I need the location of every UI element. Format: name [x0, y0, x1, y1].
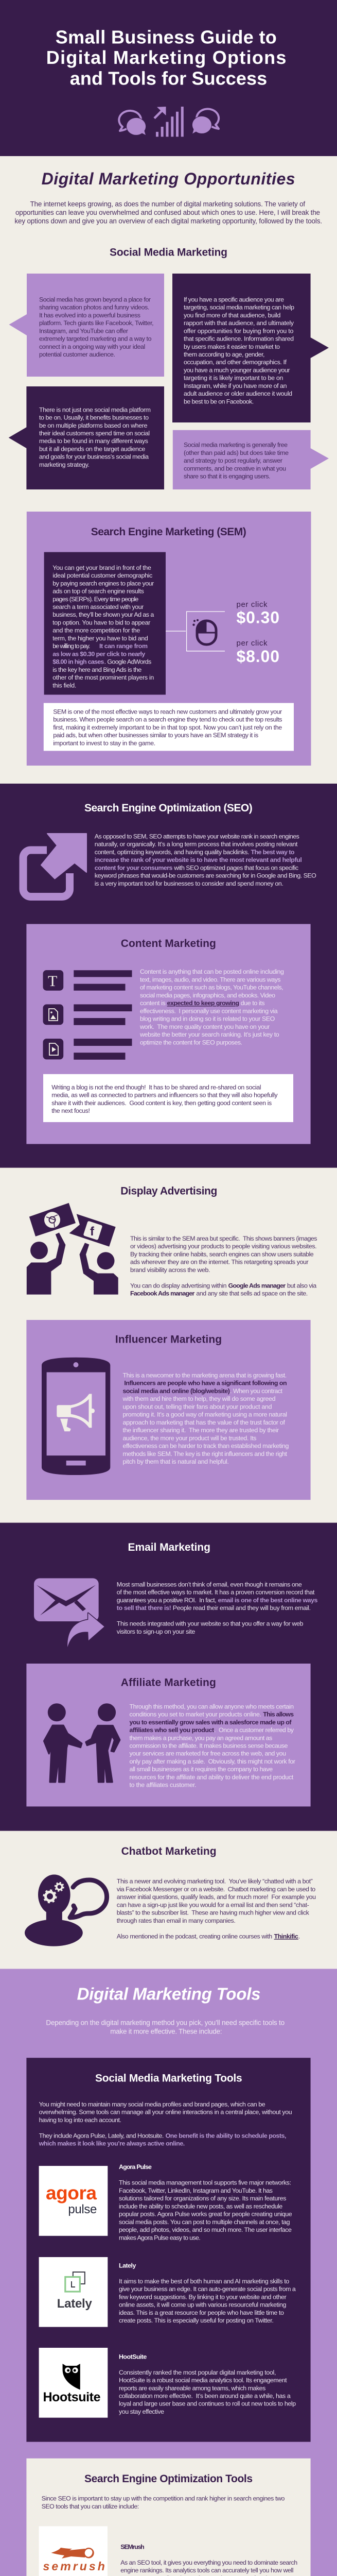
- text: influencer description: Influencers are people who have a significant following on: [124, 1380, 287, 1387]
- panel: specific audience callout: that specific audience. Information shared: [184, 335, 294, 342]
- text: affiliate description: . Once a customer referred by: [214, 1726, 294, 1734]
- tool: Agora Pulse: [119, 2163, 292, 2241]
- logo: Hootsuite: Hootsuite: [43, 2390, 101, 2404]
- logo: Lately: [39, 2257, 108, 2327]
- intro text: opportunities can leave you overwhelmed and confused about which ones to use. Here, I will break the: [15, 209, 320, 216]
- panel: specific audience callout: you have a much younger audience your: [184, 366, 290, 374]
- text: content description: website the better your search ranking. It’s just key to: [139, 1031, 279, 1038]
- text: affiliate description: [130, 1703, 295, 1789]
- text box: SEM description: by paying search engines to place your: [52, 580, 154, 587]
- panel: free but takes time callout: Social media marketing is generally free: [184, 442, 288, 449]
- text: content description: expected to keep growing: [167, 999, 239, 1007]
- text: SEO description: increase the rank of your website is to have the most relevant and helpful: [95, 856, 302, 863]
- section: Digital Marketing Tools: [0, 1969, 337, 2576]
- text: email description: [117, 1581, 317, 1635]
- stat: cost per click low: per click: [237, 600, 268, 609]
- panel: social media platform callout: potential customer audience.: [39, 351, 115, 358]
- panel: Influencer Marketing: [26, 1320, 311, 1500]
- tool: SEMrush: [120, 2543, 297, 2576]
- text: affiliate description: resources for the affiliate and ability to deliver the end product: [130, 1773, 294, 1781]
- text: SEO description: is a very important tool for businesses to consider and spend money on.: [95, 880, 283, 887]
- tool: HootSuite: Consistently ranked the most popular digital marketing tool,: [119, 2369, 276, 2376]
- panel: specific audience callout: Instagram, while if you have more of an: [184, 382, 287, 389]
- tool: SEMrush: As an SEO tool, it gives you everything you need to dominate search: [120, 2559, 297, 2566]
- panel: multiple platforms callout: and goals for your business’s social media: [39, 453, 149, 461]
- text: social tools intro: having to log into each account.: [39, 2116, 121, 2124]
- panel: social media platform callout: It has evolved into a powerful business: [39, 312, 140, 319]
- text: influencer description: pitch by them that is natural and helpful.: [122, 1458, 229, 1465]
- text box: SEM description: business, they’ll be shown your Ad as a: [52, 611, 154, 618]
- text: social tools intro: They include Agora Pulse, Lately, and Hootsuite.: [39, 2132, 164, 2139]
- text box: SEM description: this field.: [52, 682, 76, 689]
- panel: specific audience callout: offer opportunities for buying from you to: [184, 327, 293, 334]
- panel: multiple platforms callout: [9, 386, 164, 489]
- icon: phone with megaphone: [42, 1358, 110, 1475]
- panel: Content Marketing: [26, 924, 311, 1144]
- text: affiliate description: only pay after making a sale. Obviously, this might not work for: [130, 1758, 295, 1765]
- text box: SEM effectiveness: SEM is one of the most effective ways to reach new customers and ultimately grow your: [53, 708, 282, 715]
- tool: HootSuite: collaboration more effective. It’s been around quite a while, has a: [119, 2393, 291, 2400]
- icon: text content tile: T: [48, 973, 57, 990]
- panel: social media platform callout: Social media has grown beyond a place for: [39, 296, 151, 303]
- panel: specific audience callout: by users makes it easier to market to: [184, 343, 280, 350]
- icon: speech bubbles left: [119, 111, 146, 135]
- logo: SEMrush: semrush: [43, 2560, 105, 2573]
- icon: speech bubbles right: [192, 109, 219, 134]
- text: affiliate description: Through this method, you can allow anyone who meets certain: [130, 1703, 294, 1710]
- text: influencer description: approach to marketing that has the value of the trust factor of: [122, 1419, 285, 1426]
- icon: rising bar chart with arrow: [154, 107, 184, 137]
- text: chatbot description: Also mentioned in the podcast, creating online courses with: [117, 1933, 272, 1940]
- stat: cost per click high: per click: [237, 639, 268, 648]
- heading: Digital Marketing Tools: Digital Marketing Tools: [77, 1985, 260, 2003]
- text: influencer description: methods like SEM. The key is the right influencers and the right: [122, 1450, 288, 1458]
- panel: free but takes time callout: share so that it is engaging users.: [184, 473, 271, 480]
- panel: multiple platforms callout: but it all depends on the target audience: [39, 445, 145, 452]
- icon: text content tile: [43, 970, 132, 991]
- icon: two people shaking hands: [44, 1704, 120, 1782]
- panel: social media platform callout: Instagram, and YouTube can offer: [39, 327, 128, 334]
- logo: Lately: Lately: [57, 2297, 92, 2311]
- text: affiliate description: them makes a purchase, you pay an agreed amount as: [130, 1734, 272, 1741]
- text: content description: due to its: [241, 999, 265, 1007]
- text: social tools intro: which makes it look like you’re always active online.: [39, 2140, 185, 2147]
- stat: cost per click low: $0.30: [237, 608, 279, 626]
- text: influencer description: [122, 1371, 289, 1465]
- text box: SEM description: be willing to pay.: [52, 642, 90, 650]
- logo: SEMrush: [39, 2526, 108, 2576]
- section: Chatbot Marketing: [25, 1845, 316, 1946]
- text: email description: of the most effective ways to market. It has a proven conversion record that: [117, 1589, 315, 1596]
- text: content description: [139, 968, 284, 1046]
- heading: Search Engine Optimization Tools: Search Engine Optimization Tools: [84, 2473, 253, 2485]
- stat: cost per click high: $8.00: [237, 647, 279, 666]
- text: email description: People read their email and they will buy from email.: [173, 1604, 311, 1612]
- text: affiliate description: commission to the affiliate. It makes business sense because: [130, 1742, 288, 1750]
- text box: SEM effectiveness: important to invest to stay in the game.: [53, 739, 155, 747]
- logo: Agora Pulse: agora: [46, 2182, 97, 2204]
- tool: Lately: create posts. This is especially useful for posting on Twitter.: [119, 2317, 274, 2324]
- text: display description: brand visibility across the web.: [130, 1266, 210, 1274]
- text: display description: You can do display advertising within: [130, 1282, 227, 1289]
- panel: multiple platforms callout: media to be found in many different ways: [39, 437, 148, 445]
- heading: SEO: Search Engine Optimization (SEO): [84, 802, 253, 814]
- text: display description: Google Ads manager: [228, 1282, 286, 1289]
- heading: SEM: Search Engine Marketing (SEM): [91, 526, 246, 538]
- heading: Influencer Marketing: Influencer Marketing: [115, 1334, 222, 1346]
- text: chatbot description: via Facebook Messenger or on a website. Chatbot marketing can be used to: [117, 1886, 315, 1893]
- icon: image content tile: [43, 1004, 132, 1025]
- text: social tools intro: One benefit is the ability to schedule posts,: [166, 2132, 286, 2139]
- text: social tools intro: overwhelming. Some tools can manage all your online interactions in a central place, without you: [39, 2109, 292, 2116]
- tool: HootSuite: you stay effective: [119, 2408, 164, 2415]
- panel: Social Media Marketing Tools: [26, 2058, 311, 2442]
- heading: Chatbot Marketing: Chatbot Marketing: [121, 1845, 217, 1857]
- panel: free but takes time callout: [173, 430, 329, 489]
- icon: people holding ad banners: [27, 1203, 118, 1295]
- text box: SEM description: is the key here and Bing Ads is the: [52, 666, 141, 673]
- tool: HootSuite: [119, 2353, 296, 2415]
- intro text: key options down and give you an overview of each digital marketing opportunity, followed by the tools.: [14, 217, 322, 225]
- tool: Lately: few keyword suggestions. By linking it to your website and other: [119, 2293, 287, 2300]
- text: display description: This is similar to the SEM area but specific. This shows banners (images: [130, 1235, 317, 1242]
- text: email description: Most small businesses don’t think of email, even though it remains one: [117, 1581, 302, 1588]
- tool: Agora Pulse: Agora Pulse: [119, 2163, 152, 2171]
- text: content description: social media pages, infographics, and ebooks. Video: [140, 992, 275, 999]
- heading: Email Marketing: Email Marketing: [128, 1541, 210, 1553]
- heading: Social Media Marketing: Social Media Marketing: [110, 247, 227, 259]
- text box: SEM description: It can range from: [99, 642, 148, 650]
- tool: SEMrush: SEMrush: [120, 2543, 145, 2550]
- text: tools intro: Depending on the digital marketing method you pick, you’ll need specific tools to: [46, 2019, 285, 2027]
- logo: Agora Pulse: [39, 2166, 108, 2236]
- tool: Agora Pulse: include the ability to schedule new posts, as well as reschedule: [119, 2202, 282, 2210]
- tool: Agora Pulse: people, add photos, videos, and so much more. The user interface: [119, 2226, 292, 2233]
- tool: Agora Pulse: This social media management tool supports five major networks:: [119, 2179, 291, 2187]
- panel: specific audience callout: rapport with that audience, and ultimately: [184, 319, 294, 327]
- text: affiliate description: to the affiliates customer.: [130, 1782, 197, 1789]
- text: content description: work. The more quality content you have on your: [139, 1023, 270, 1030]
- text: SEO description: keyword phrases that would-be customers are searching for in Google and Bing. SEO: [95, 872, 316, 879]
- heading: Digital Marketing Opportunities: Digital Marketing Opportunities: [42, 170, 295, 188]
- tool: Lately: Lately: [119, 2262, 136, 2269]
- text: chatbot description: Thinkific: [274, 1933, 298, 1940]
- text: influencer description: promoting it. It’s a good way of marketing using a more natural: [122, 1411, 287, 1418]
- title: Digital Marketing Options: [46, 47, 286, 68]
- text: email description: visitors to sign-up on your site: [117, 1628, 195, 1635]
- panel: Search Engine Optimization Tools: [26, 2459, 311, 2576]
- text: content description: blog writing and in doing so it is related to your SEO: [140, 1015, 275, 1023]
- stat: cost per click high: [237, 639, 279, 666]
- heading: Content Marketing: Content Marketing: [121, 938, 216, 950]
- text: display description: and any site that sells ad space on the site.: [196, 1290, 308, 1297]
- panel: social media platform callout: [9, 274, 164, 377]
- heading: Display Advertising: Display Advertising: [120, 1185, 217, 1197]
- tool: HootSuite: reports are easily shareable among teams, which makes: [119, 2384, 265, 2392]
- text: tools intro: make it more effective. These include:: [110, 2027, 222, 2035]
- text: affiliate description: affiliates who sell you product: [130, 1726, 214, 1734]
- text: content description: of marketing content such as blogs, YouTube channels,: [140, 984, 283, 991]
- text: chatbot description: .: [298, 1933, 300, 1940]
- text box: SEM effectiveness: first, making it extremely important to be in that top spot. Now you can’t just rely on the: [53, 724, 282, 731]
- title: and Tools for Success: [70, 68, 267, 89]
- text: display description: but also via: [287, 1282, 316, 1289]
- text: email description: guarantees you a positive ROI. In fact,: [117, 1597, 217, 1604]
- tool: Agora Pulse: popular posts. Agora Pulse works great for people creating unique: [119, 2211, 292, 2218]
- panel: specific audience callout: targeting it is likely important to be on: [184, 375, 283, 382]
- text: SEO tools intro: SEO tools that you can utilize include:: [42, 2503, 139, 2510]
- text: tools intro: [46, 2019, 285, 2035]
- text: display description: Facebook Ads manager: [130, 1290, 194, 1297]
- text: email description: to sell that there is!: [117, 1604, 171, 1612]
- panel: free but takes time callout: (other than paid ads) but does take time: [184, 449, 289, 456]
- text box: SEM description: . Google AdWords: [104, 658, 151, 666]
- panel: multiple platforms callout: marketing strategy.: [39, 461, 90, 468]
- text box: sharing content: the next focus!: [51, 1107, 90, 1114]
- heading: Affiliate Marketing: Affiliate Marketing: [121, 1677, 216, 1689]
- tool: Agora Pulse: Facebook, Twitter, LinkedIn, Instagram and YouTube. It has: [119, 2187, 273, 2194]
- text: display description: ads wherever they are on the internet. This retargeting spreads your: [130, 1259, 309, 1266]
- text: SEO description: [95, 833, 316, 887]
- text box: SEM description: top option. You have to bid to appear: [52, 619, 150, 626]
- text: SEO tools intro: [42, 2495, 285, 2510]
- tool: Agora Pulse: solutions tailored for organizations of any size. Its main features: [119, 2195, 286, 2202]
- text: display description: or videos) advertising your products to people visiting various websites.: [130, 1243, 317, 1250]
- text: SEO tools intro: Since SEO is important to stay up with the competition and rank higher in search engines two: [42, 2495, 285, 2502]
- panel: social media platform callout: platform. Tech giants like Facebook, Twitter,: [39, 319, 154, 327]
- text: SEO description: As opposed to SEM, SEO attempts to have your website rank in search engines: [95, 833, 299, 840]
- text: SEO description: content, optimizing keywords, and having quality backlinks.: [95, 849, 250, 856]
- panel: free but takes time callout: comments, and be creative in what you: [184, 465, 286, 472]
- text box: SEM description: search a term associated with your: [52, 603, 144, 611]
- icon: computer mouse: [192, 619, 216, 645]
- text box: SEM description: as low as $0.30 per click to nearly: [52, 650, 145, 657]
- text: email description: This needs integrated with your website so that you offer a way for web: [117, 1620, 303, 1628]
- panel: multiple platforms callout: to be on. Usually, it benefits businesses to: [39, 414, 149, 421]
- panel: social media platform callout: connect in a ongoing way with your ideal: [39, 343, 145, 350]
- text box: sharing content: [43, 1074, 293, 1122]
- text: chatbot description: through rates than email in many companies.: [117, 1917, 236, 1924]
- text: content description: content is: [140, 999, 166, 1007]
- panel: social media platform callout: sharing vacation photos and funny videos.: [39, 304, 149, 311]
- text: display description: By tracking their online habits, search engines can show users suitable: [130, 1251, 314, 1258]
- text: chatbot description: This a newer and evolving marketing tool. You’ve likely “chatted with a bot”: [117, 1878, 313, 1885]
- text: email description: email is one of the best online ways: [218, 1597, 317, 1604]
- text box: SEM description: ads on top of search engine results: [52, 587, 144, 595]
- icon: external link arrow: [23, 834, 86, 897]
- text box: SEM description: other of the most prominent players in: [52, 674, 154, 681]
- connector line and bracket: [166, 612, 225, 651]
- section: Email Marketing: [0, 1523, 337, 1831]
- section: Display Advertising: [27, 1185, 317, 1297]
- panel: Affiliate Marketing: [26, 1664, 311, 1806]
- icon: video content tile: [43, 1039, 132, 1060]
- heading: Social Media Marketing Tools: Social Media Marketing Tools: [95, 2072, 242, 2084]
- panel: specific audience callout: adult audience or older audience it would: [184, 390, 292, 397]
- text box: SEM description: $8.00 in high cases: [52, 658, 104, 666]
- text: SEO description: with SEO optimized pages that focus on specific: [173, 864, 298, 871]
- text: influencer description: social media and online (blog/website): [122, 1387, 230, 1395]
- text box: SEM effectiveness: paid ads, but when other businesses similar to yours have an SEM strategy it is: [53, 732, 258, 739]
- panel: multiple platforms callout: be on multiple platforms based on where: [39, 422, 148, 429]
- logo: Agora Pulse: pulse: [68, 2202, 97, 2216]
- text: influencer description: . When you contract: [230, 1387, 283, 1395]
- text: display description: [130, 1235, 317, 1297]
- text: chatbot description: [117, 1878, 316, 1940]
- text box: SEM description: You can get your brand in front of the: [52, 564, 151, 571]
- intro text: [14, 200, 322, 225]
- panel: specific audience callout: occupation, and other demographics. If: [184, 359, 287, 366]
- text box: SEM effectiveness: [44, 703, 294, 751]
- title: [46, 26, 286, 89]
- text box: SEM effectiveness: business. When people search on a search engine they tend to check out the top results: [53, 716, 282, 723]
- tool: Agora Pulse: makes Agora Pulse easy to use.: [119, 2234, 201, 2241]
- tool: Lately: [119, 2262, 296, 2324]
- section: Search Engine Optimization: [0, 784, 337, 1168]
- text: social tools intro: You might need to maintain many social media profiles and brand pages, which can be: [39, 2101, 265, 2108]
- text: affiliate description: you to essentially grow sales with a salesforce made up of: [130, 1719, 292, 1726]
- panel: specific audience callout: If you have a specific audience you are: [184, 296, 284, 303]
- panel: specific audience callout: be best to be on Facebook.: [184, 398, 254, 405]
- icon: envelope with forward arrow: [34, 1578, 104, 1647]
- text: chatbot description: answer initial questions, qualify leads, and for much more! For example you: [117, 1893, 316, 1901]
- text: content description: effectiveness. I personally use content marketing via: [140, 1007, 278, 1014]
- logo: Hootsuite: [39, 2348, 108, 2418]
- text: content description: Content is anything that can be posted online including: [140, 968, 284, 975]
- text box: sharing content: media, as well as connected to partners and influencers so that they will also hopefully: [51, 1092, 278, 1099]
- text box: SEM description: ideal potential customer demographic: [52, 572, 152, 579]
- text: content description: text, images, audio, and video. There are various ways: [140, 976, 281, 983]
- text: influencer description: effectiveness can be harder to track than established marketing: [122, 1443, 289, 1450]
- text: influencer description: This is a newcomer to the marketing arena that is growing fast.: [122, 1371, 287, 1379]
- panel: specific audience callout: you find more of that audience, build: [184, 312, 280, 319]
- text: affiliate description: your services are marketed for free across the web, and you: [130, 1750, 286, 1757]
- panel: specific audience callout: them according to age, gender,: [184, 351, 264, 358]
- tool: HootSuite: HootSuite is a robust social media analytics tool. Its engagement: [119, 2377, 287, 2384]
- icon: people holding ad banners: f: [90, 1225, 95, 1239]
- tool: Lately: ideas. This is a great resource for people who have little time to: [119, 2309, 284, 2316]
- tool: SEMrush: engine rankings. Its analytics tools can accurately tell you how well: [120, 2567, 294, 2574]
- text: SEO description: content for your consumers: [95, 864, 172, 871]
- text: content description: optimize the content for SEO purposes.: [140, 1039, 242, 1046]
- text box: sharing content: share it with their audiences. Good content is key, then getting good content seen is: [51, 1099, 272, 1107]
- tool: Lately: It aims to make the best of both human and AI marketing skills to: [119, 2278, 289, 2285]
- text: SEO description: The best way to: [251, 849, 295, 856]
- text: social tools intro: [39, 2101, 292, 2147]
- text: SEO description: naturally, or organically. It’s a long term process that involves posting relevant: [95, 841, 298, 848]
- panel: specific audience callout: [172, 274, 329, 422]
- panel: multiple platforms callout: There is not just one social media platform: [39, 406, 151, 413]
- panel: social media platform callout: extremely targeted marketing and a way to: [39, 335, 152, 342]
- tool: Lately: give your business an edge. It can auto-generate social posts from a: [119, 2285, 296, 2293]
- tool: HootSuite: HootSuite: [119, 2353, 147, 2360]
- panel: multiple platforms callout: their ideal customers spend time on social: [39, 430, 150, 437]
- icon: head with gears and speech bubble: [25, 1874, 107, 1946]
- text: influencer description: upon shout out, telling their fans about your product and: [122, 1403, 272, 1410]
- intro text: The internet keeps growing, as does the number of digital marketing solutions. The variety of: [30, 200, 305, 208]
- panel: free but takes time callout: and strategy to post regularly, answer: [184, 457, 282, 464]
- text: influencer description: the influencer sharing it. The more they are trusted by their: [122, 1427, 279, 1434]
- panel: Search Engine Marketing: [27, 512, 311, 766]
- tool: HootSuite: loyal and large user base and continues to roll out new tools to help: [119, 2400, 296, 2408]
- text box: SEM description: [44, 552, 166, 694]
- text box: SEM description: and the more competition for the: [52, 627, 140, 634]
- tool: Agora Pulse: social media posts. You can post to multiple channels at once, tag: [119, 2218, 290, 2226]
- text box: sharing content: Writing a blog is not the end though! It has to be shared and re-shared on social: [51, 1083, 261, 1091]
- text box: SEM description: term, the higher you have to bid and: [52, 635, 148, 642]
- text: affiliate description: all small businesses as it requires the company to have: [130, 1766, 273, 1773]
- text: chatbot description: can have a sign-up just like you would for a email list and then send “chat-: [117, 1901, 309, 1908]
- text: affiliate description: This allows: [263, 1710, 294, 1718]
- panel: specific audience callout: targeting, social media marketing can help: [184, 304, 294, 311]
- title: Small Business Guide to: [56, 26, 277, 47]
- text: influencer description: with them and hire them to help, they will do some agreed: [122, 1395, 276, 1402]
- text: affiliate description: conditions you set to market your products online.: [130, 1710, 261, 1718]
- header banner: [0, 0, 337, 156]
- text box: SEM description: pages (SERPs). Every time people: [52, 596, 138, 603]
- tool: Lately: online assets, it will come up with various resourceful marketing: [119, 2301, 286, 2309]
- text: influencer description: audience, the more your product will be trusted. Its: [122, 1434, 256, 1442]
- text: chatbot description: blasts” to the subscriber list. These are having much higher view and click: [117, 1909, 310, 1917]
